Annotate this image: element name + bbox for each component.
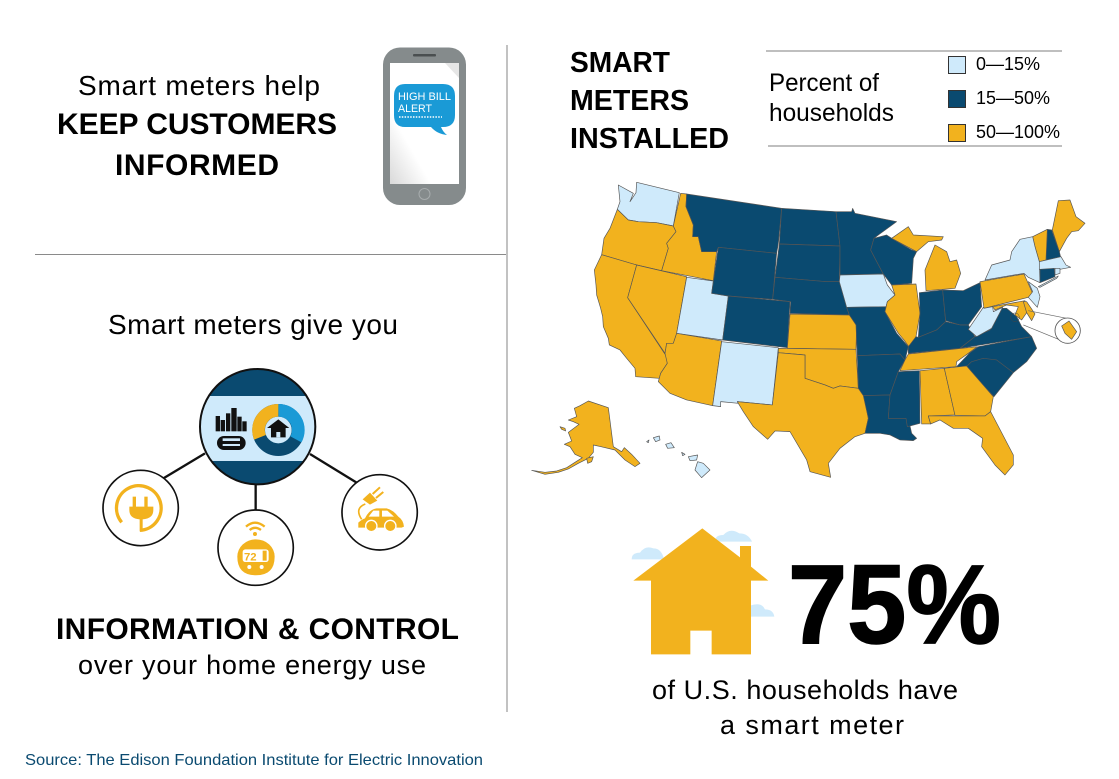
heading: smart meters installed: INSTALLED [570, 123, 729, 155]
icon: house with clouds [632, 528, 774, 654]
legend: percent of households: 0—15% [976, 54, 1040, 74]
legend: percent of households: 15—50% [976, 88, 1050, 108]
icon: phone with high bill alert: HIGH BILL [398, 91, 451, 103]
legend: percent of households: Percent of [769, 69, 879, 97]
text: information and control [56, 613, 459, 680]
source note: Source: The Edison Foundation Institute for Electric Innovation [25, 752, 483, 769]
legend: percent of households [766, 51, 1062, 146]
text: of U.S. households [652, 675, 958, 740]
text: information and control: over your home energy use [78, 650, 426, 680]
icon: thermostat with wifi: 72 [244, 551, 257, 563]
heading: keep customers informed: INFORMED [115, 149, 279, 182]
text: information and control: INFORMATION & CONTROL [56, 613, 459, 646]
icon: phone with high bill alert [383, 48, 466, 205]
statistic: 75 percent: 75% [788, 542, 1001, 667]
heading: keep customers informed [57, 70, 337, 182]
subheading: smart meters give you: Smart meters give you [108, 309, 398, 340]
map: smart meter adoption by state [532, 182, 1085, 478]
icon: plug [103, 470, 178, 546]
legend: percent of households: 50—100% [976, 122, 1060, 142]
icon: thermostat with wifi [218, 510, 293, 585]
icon: home display hub [197, 369, 320, 484]
heading: keep customers informed: KEEP CUSTOMERS [57, 108, 337, 141]
heading: smart meters installed [570, 47, 729, 155]
heading: keep customers informed: Smart meters help [78, 70, 320, 101]
legend: percent of households: households [769, 99, 894, 127]
text: of U.S. households: a smart meter [720, 710, 904, 740]
icon: phone with high bill alert: ALERT [398, 103, 432, 115]
heading: smart meters installed: SMART [570, 47, 670, 79]
heading: smart meters installed: METERS [570, 85, 689, 117]
diagram: smart meter hub and devices [103, 369, 417, 585]
icon: electric car [342, 475, 417, 550]
text: of U.S. households: of U.S. households have [652, 675, 958, 705]
